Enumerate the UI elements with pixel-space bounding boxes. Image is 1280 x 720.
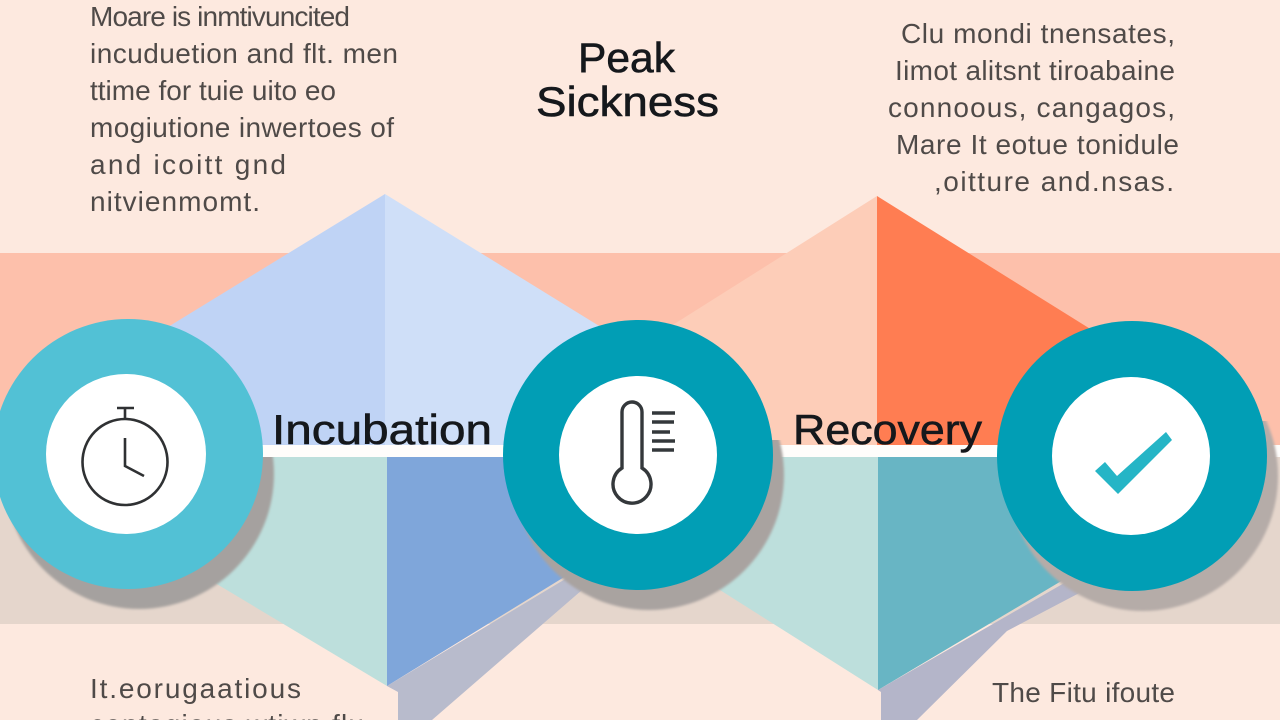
stage 3 marker: check bbox=[997, 321, 1278, 611]
title: Peak Sickness bbox=[536, 34, 719, 125]
text block: top right: ,oitture and.nsas. bbox=[934, 166, 1174, 197]
icon: stopwatch bbox=[82, 408, 168, 505]
icon: thermometer bbox=[613, 402, 675, 503]
diamond: recovery bbox=[640, 196, 1100, 690]
text block: top left: nitvienmomt. bbox=[90, 186, 260, 217]
stage 1 marker: stopwatch bbox=[0, 319, 274, 609]
text block: top right: Clu mondi tnensates, bbox=[901, 18, 1175, 49]
text block: top right: connoous, cangagos, bbox=[888, 92, 1175, 123]
text block: bottom right: The Fitu ifoute bbox=[992, 677, 1175, 708]
center white line bbox=[0, 445, 1280, 457]
text block: top right: Mare It eotue tonidule bbox=[896, 129, 1179, 160]
text block: bottom left: It.eorugaatious bbox=[90, 673, 301, 704]
text block: top left: incuduetion and flt. men bbox=[90, 38, 398, 69]
lower beige band bbox=[0, 457, 1280, 624]
stage 2 marker: thermometer bbox=[503, 320, 784, 610]
title: Peak Sickness: Peak bbox=[578, 34, 676, 81]
icon: check mark bbox=[1095, 432, 1172, 494]
diamond: incubation bbox=[130, 194, 630, 686]
text block: top left: Moare is inmtivuncited bbox=[90, 1, 350, 32]
text block: top left bbox=[90, 1, 398, 217]
text block: top left: ttime for tuie uito eo bbox=[90, 75, 336, 106]
diamond shadow: incubation bbox=[387, 578, 582, 720]
text block: top right: Iimot alitsnt tiroabaine bbox=[895, 55, 1175, 86]
text block: top right bbox=[888, 18, 1179, 197]
title: Peak Sickness: Sickness bbox=[536, 78, 719, 125]
label: Incubation: Incubation bbox=[272, 406, 492, 453]
text block: top left: and icoitt gnd bbox=[90, 149, 286, 180]
label: Recovery: Recovery bbox=[793, 406, 982, 453]
upper coral band bbox=[0, 253, 1280, 445]
text block: bottom left bbox=[90, 673, 364, 720]
diamond shadow: recovery bbox=[878, 578, 1085, 720]
text block: top left: mogiutione inwertoes of bbox=[90, 112, 394, 143]
